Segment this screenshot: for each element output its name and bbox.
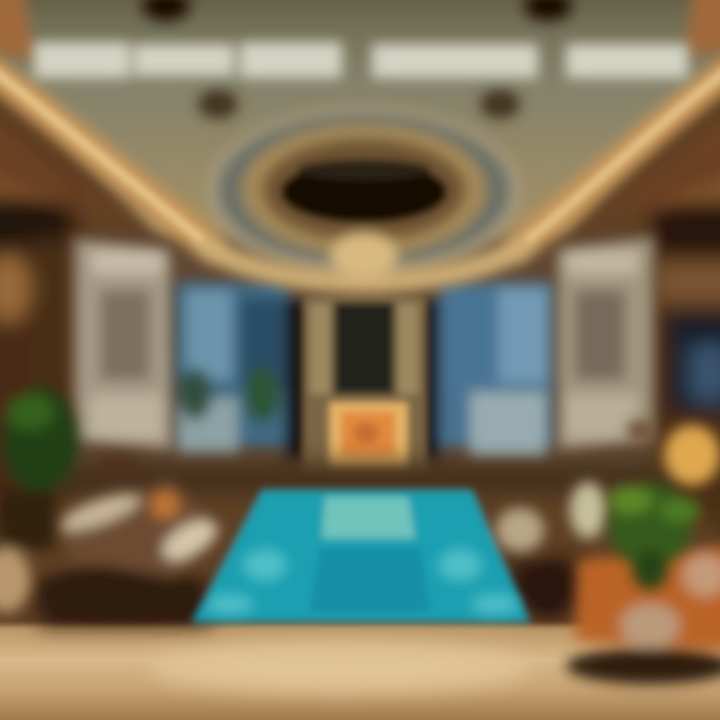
lobby floor: [0, 620, 720, 720]
planter: [566, 545, 720, 684]
dark furniture base band: [40, 462, 680, 625]
ring dark centre: [282, 160, 446, 222]
bookshelf panel left: [76, 240, 172, 450]
warm lamp right: [626, 420, 720, 485]
ceiling ring medallion: [206, 106, 522, 278]
bookshelf panel right: [558, 238, 652, 450]
ceiling spotlights: [142, 0, 572, 119]
orange artwork panel: [329, 402, 408, 468]
sofa left: [38, 455, 223, 618]
floor glow: [150, 644, 530, 692]
window left: [176, 282, 307, 460]
golden beams and cove light: [0, 62, 720, 282]
beam shadows outer: [0, 115, 720, 220]
central column with dark door: [303, 296, 427, 476]
seating right: [496, 482, 606, 616]
window right: [416, 282, 552, 460]
back wall: [70, 235, 655, 475]
left wall: [0, 90, 80, 560]
central pendant glow: [330, 232, 398, 280]
plant left: [0, 388, 78, 612]
teal rug: [192, 490, 530, 622]
corner beams: [0, 0, 720, 60]
rug highlights: [206, 549, 519, 614]
ceiling: [0, 0, 720, 280]
beam highlights: [0, 68, 720, 238]
right wall: [650, 90, 720, 560]
foliage: [608, 483, 700, 590]
title: illegible blurred heading: [34, 42, 688, 78]
plant right with orange planter: [566, 483, 720, 684]
